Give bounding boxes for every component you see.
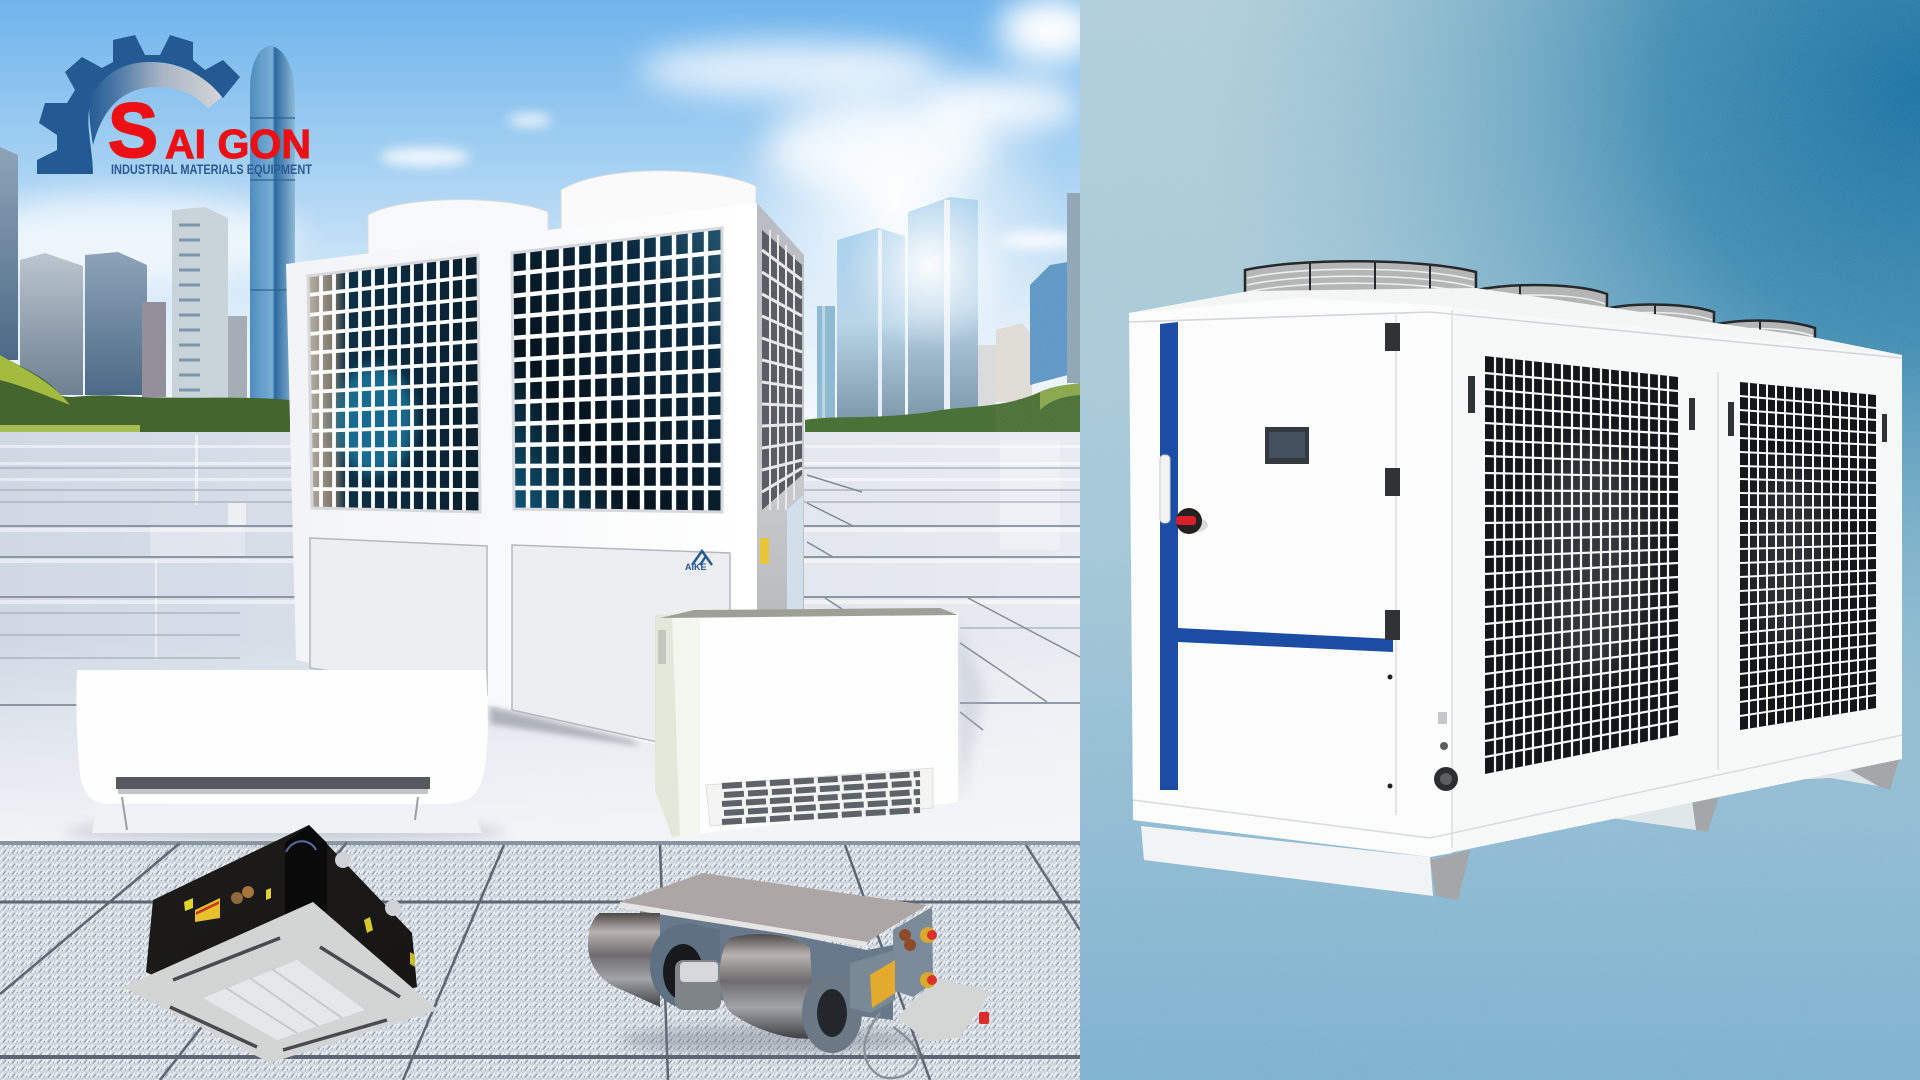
heat pump unit: [286, 171, 804, 768]
logo arc: [89, 62, 222, 145]
red isolator knob: [1176, 508, 1208, 534]
top plate: [1129, 288, 1902, 355]
front body: [1129, 298, 1452, 857]
top plate: [620, 873, 927, 942]
side vent grille: [762, 230, 802, 510]
pipe fittings: [899, 927, 989, 1024]
panel: chiller on blue backdrop: [1080, 0, 1920, 1080]
ducted fan coil unit: [588, 873, 992, 1078]
motor: [675, 960, 721, 1010]
skyline right: [817, 193, 1080, 418]
base plinth: [1141, 826, 1433, 896]
blue trim: [1160, 322, 1393, 790]
right intake grille: [512, 228, 722, 512]
sun glare: [855, 197, 996, 341]
lower panels: [310, 538, 730, 758]
condenser grille 2: [1735, 378, 1881, 735]
side face: [757, 203, 804, 610]
fittings: [1388, 674, 1458, 791]
touch screen: [1265, 427, 1309, 464]
skyline left: [0, 46, 295, 400]
brand mark on heat pump: [685, 551, 712, 572]
drip tray: [897, 978, 992, 1042]
cable: [864, 1013, 918, 1078]
centre blower: [720, 934, 815, 1039]
front face: [286, 203, 757, 768]
long side body: [1430, 305, 1902, 857]
fan cowl right: [560, 170, 756, 228]
logo: Saigon Industrial Materials Equipment: AI GON: [165, 121, 311, 167]
fan guards: [1245, 261, 1815, 344]
logo gear: [37, 35, 240, 174]
air-cooled chiller: [1129, 261, 1902, 900]
floor: [0, 432, 1080, 1080]
greenery hedge: [0, 355, 1080, 432]
sky with clouds: [0, 0, 1100, 440]
left blower: [588, 913, 660, 1007]
cassette panel: [123, 902, 438, 1063]
backdrop: [1080, 0, 1920, 1080]
warning label: [760, 538, 769, 564]
logo wordmark: S: [108, 88, 158, 174]
left intake grille: [308, 255, 480, 512]
coil bracket: [893, 907, 933, 997]
wall split air conditioner: [65, 670, 505, 842]
logo: Saigon Industrial Materials Equipment: [37, 35, 312, 177]
fan cowl left: [368, 200, 548, 260]
door latches: [1385, 323, 1887, 640]
vent louvres: [706, 768, 933, 826]
logo tagline: INDUSTRIAL MATERIALS EQUIPMENT: [111, 161, 312, 177]
panel: rooftop HVAC product range: [0, 0, 1100, 1080]
control box: [850, 950, 895, 1013]
ceiling cassette unit: [123, 825, 438, 1063]
brand mark on heat pump: AIKE: [685, 562, 707, 572]
rear frame: [640, 905, 893, 1020]
condenser grille 1: [1480, 350, 1685, 780]
floor-standing fan coil: [655, 608, 985, 837]
door pull: [1160, 455, 1170, 523]
vent slot: [116, 777, 430, 830]
feet: [1430, 757, 1900, 900]
